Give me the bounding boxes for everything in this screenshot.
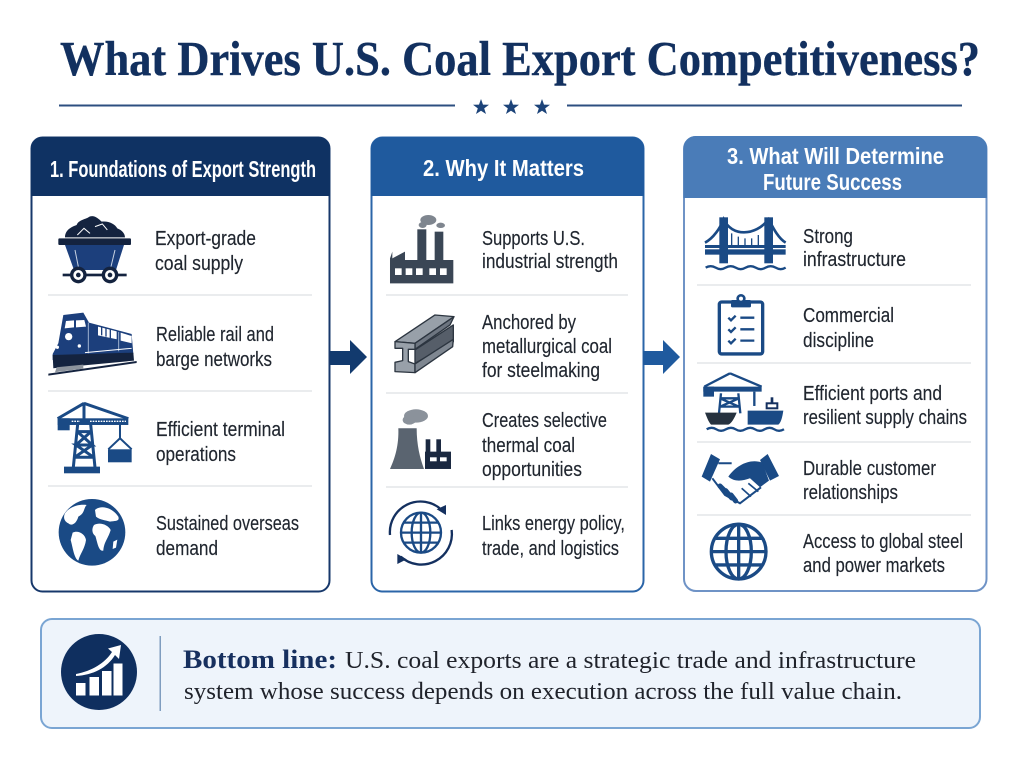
arrow: panel 2 to panel 3	[643, 340, 680, 374]
item: creates selective thermal coal opportunities	[390, 409, 607, 481]
item: sustained overseas demand: Sustained overseas	[156, 513, 299, 535]
item: supports U.S. industrial strength	[390, 215, 618, 283]
panel: foundations of export strength	[31, 137, 330, 592]
item: reliable rail and barge networks: barge networks	[156, 349, 272, 371]
item: links energy policy, trade, and logistics	[390, 502, 625, 565]
item: efficient ports and resilient supply chains	[703, 373, 967, 431]
item: strong infrastructure: infrastructure	[803, 249, 906, 271]
item: reliable rail and barge networks	[48, 313, 274, 376]
icon: wireframe globe	[711, 524, 766, 579]
item: supports U.S. industrial strength: industrial strength	[482, 251, 618, 273]
item: anchored by metallurgical coal	[395, 312, 612, 382]
panel 3 header: 3. What Will Determine	[727, 143, 944, 169]
item: export-grade coal supply	[58, 216, 256, 283]
item: access to global steel and power markets: and power markets	[803, 555, 945, 577]
icon: steel I-beam	[395, 315, 454, 373]
icon: train	[48, 313, 137, 376]
icon: earth globe	[59, 499, 125, 566]
icon: handshake	[702, 454, 779, 503]
item: efficient ports and resilient supply chains: resilient supply chains	[803, 407, 967, 429]
icon: factory	[390, 215, 453, 283]
panel 1 header	[31, 137, 330, 196]
item: export-grade coal supply: Export-grade	[155, 228, 256, 250]
callout text: U.S. coal exports are a strategic trade and infrastructure	[345, 648, 916, 674]
icon: suspension bridge	[705, 217, 786, 269]
panel: what will determine future success	[684, 136, 987, 591]
icon: cooling tower and power plant	[390, 409, 451, 469]
item: supports U.S. industrial strength: Supports U.S.	[482, 228, 585, 250]
item: creates selective thermal coal opportunities: opportunities	[482, 459, 582, 481]
item: strong infrastructure	[705, 217, 906, 271]
item: anchored by metallurgical coal: for steelmaking	[482, 360, 600, 382]
callout text: Bottom line:	[183, 645, 337, 674]
item: commercial discipline: Commercial	[803, 305, 894, 327]
panel: why it matters	[371, 137, 644, 592]
item: durable customer relationships: relationships	[803, 482, 898, 504]
arrow: panel 1 to panel 2	[330, 340, 367, 374]
panel 3 header	[684, 136, 987, 198]
item: strong infrastructure: Strong	[803, 226, 853, 248]
item: efficient ports and resilient supply chains: Efficient ports and	[803, 383, 942, 405]
callout text	[183, 645, 916, 705]
item: anchored by metallurgical coal: metallurgical coal	[482, 336, 612, 358]
icon: coal cart	[58, 216, 131, 283]
item: anchored by metallurgical coal: Anchored by	[482, 312, 576, 334]
item: export-grade coal supply: coal supply	[155, 253, 243, 275]
item: access to global steel and power markets: Access to global steel	[803, 531, 963, 553]
panel 1 header: 1. Foundations of Export Strength	[50, 156, 316, 182]
item: durable customer relationships	[702, 454, 936, 504]
icon: rising bar chart badge	[61, 634, 137, 710]
item: commercial discipline	[719, 295, 894, 354]
item: access to global steel and power markets	[711, 524, 963, 579]
panel: bottom line callout	[41, 619, 980, 728]
item: efficient terminal operations: Efficient terminal	[156, 419, 285, 441]
panel 3 header: Future Success	[763, 169, 902, 195]
panel 2 header: 2. Why It Matters	[423, 155, 584, 181]
item: reliable rail and barge networks: Reliable rail and	[156, 324, 274, 346]
item: efficient terminal operations	[58, 403, 285, 473]
item: commercial discipline: discipline	[803, 330, 874, 352]
item: sustained overseas demand	[59, 499, 299, 566]
icon: port crane and ships	[703, 373, 784, 431]
icon: clipboard checklist	[719, 295, 763, 354]
item: durable customer relationships: Durable customer	[803, 458, 936, 480]
panel 2 header	[371, 137, 644, 196]
icon: globe with cycle arrows	[390, 502, 452, 565]
item: sustained overseas demand: demand	[156, 538, 218, 560]
icon: terminal crane	[58, 403, 132, 473]
callout text: system whose success depends on execution across the full value chain.	[184, 679, 902, 705]
item: creates selective thermal coal opportunities: Creates selective	[482, 410, 607, 432]
item: efficient terminal operations: operations	[156, 444, 236, 466]
title divider with stars	[59, 99, 962, 114]
item: creates selective thermal coal opportunities: thermal coal	[482, 435, 575, 457]
item: links energy policy, trade, and logistics: Links energy policy,	[482, 513, 625, 535]
item: links energy policy, trade, and logistics: trade, and logistics	[482, 538, 619, 560]
